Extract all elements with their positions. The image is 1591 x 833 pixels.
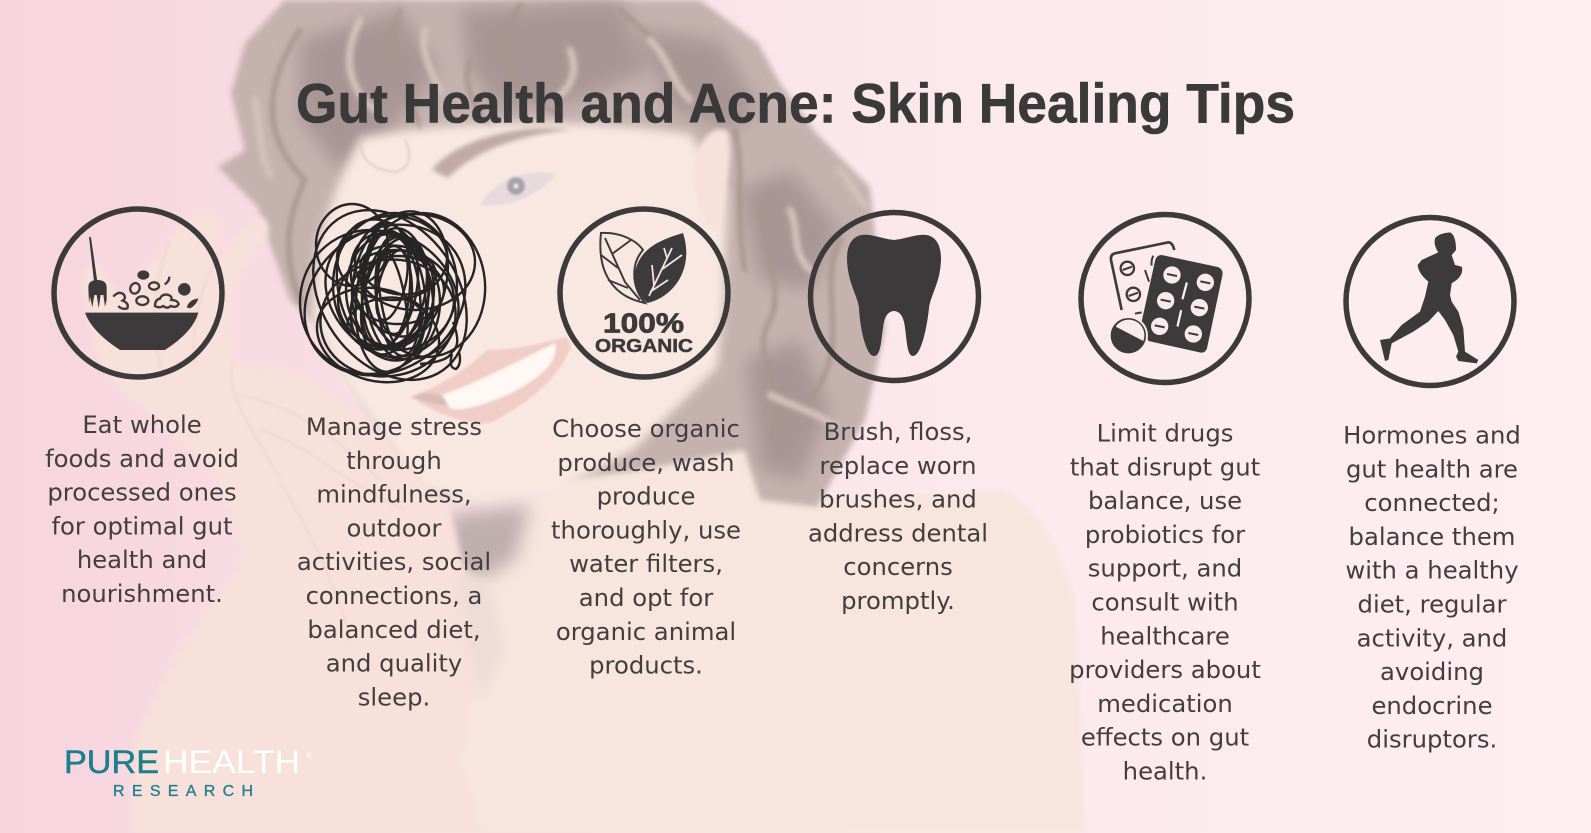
tip text: hormones: balance them (1349, 522, 1515, 551)
photo: eyebrow (432, 128, 570, 178)
icon: 100% organic badge: ORGANIC (595, 336, 693, 356)
tip text: whole foods: foods and avoid (45, 444, 239, 473)
tip text: organic produce: produce, wash (557, 448, 735, 477)
logo: Pure Health Research: HEALTH (163, 744, 300, 780)
icon: tangled scribble (275, 181, 498, 409)
tip text: hormones: Hormones and (1343, 420, 1521, 450)
tip text: medications: effects on gut (1081, 723, 1249, 752)
tip text: hormones: activity, and (1357, 623, 1507, 652)
tip text: dental care: replace worn (819, 451, 977, 480)
tip text: whole foods: Eat whole (82, 410, 202, 439)
tip text: medications: healthcare (1100, 621, 1230, 650)
tip text: stress: mindfulness, (316, 480, 472, 509)
tip text: medications: medication (1097, 689, 1233, 718)
tip text: whole foods: health and (77, 545, 207, 574)
tip text: stress: sleep. (358, 682, 430, 711)
tip text: stress: and quality (326, 649, 462, 678)
tip text: medications: Limit drugs (1097, 418, 1233, 448)
tip text: organic produce: water filters, (569, 549, 723, 578)
tip text: dental care: Brush, floss, (824, 417, 972, 446)
tip text: medications: consult with (1091, 588, 1239, 616)
logo: Pure Health Research: RESEARCH (113, 783, 253, 800)
photo: hair strands (255, 5, 865, 440)
tip text: organic produce: thoroughly, use (551, 515, 741, 544)
title: Gut Health and Acne: Skin Healing Tips (296, 72, 1295, 134)
photo: neck shadow (448, 505, 530, 580)
tip text: whole foods: for optimal gut (51, 511, 233, 540)
tip text: organic produce: produce (597, 482, 695, 511)
photo: raised hand and arm (82, 211, 480, 833)
tip text: organic produce: organic animal (556, 617, 736, 646)
photo: lips and smile (410, 337, 571, 423)
icon: food bowl (54, 209, 222, 377)
photo: ear (692, 129, 730, 230)
background photo: woman smiling (82, 0, 1085, 833)
tip text: medications: providers about (1069, 655, 1261, 684)
tip text: hormones: gut health are (1346, 454, 1518, 483)
photo: forehead curl (361, 135, 409, 172)
tip text: medications: support, and (1088, 554, 1242, 583)
tip text: hormones: endocrine (1371, 691, 1493, 720)
photo: eye (480, 172, 556, 205)
photo: face (312, 123, 727, 507)
tip text: dental care: brushes, and (819, 485, 977, 514)
icon: tooth (810, 212, 978, 380)
tip text: hormones: connected; (1364, 488, 1500, 517)
photo: finger creases (154, 240, 405, 640)
tip text: medications: balance, use (1088, 486, 1242, 515)
tip text: organic produce: Choose organic (552, 414, 740, 443)
tip text: stress: activities, social (297, 547, 491, 576)
tip text: organic produce: products. (589, 651, 703, 680)
logo: Pure Health Research: PURE (64, 744, 159, 780)
photo: hair (218, 0, 885, 507)
logo: Pure Health Research (64, 744, 312, 800)
tip text: stress: through (346, 446, 442, 475)
tip text: dental care: promptly. (841, 586, 955, 615)
tip text: hormones: avoiding (1380, 657, 1484, 686)
photo: hair dark patches (300, 0, 840, 480)
tip text: medications: probiotics for (1085, 520, 1245, 549)
tip text: stress: outdoor (347, 513, 441, 542)
tip text: hormones: diet, regular (1358, 590, 1506, 618)
tip text: dental care: concerns (843, 552, 953, 581)
icon: 100% organic badge: 100% (603, 308, 684, 338)
tip text: whole foods: processed ones (47, 478, 237, 507)
icon: 100% organic badge (560, 209, 728, 377)
photo: shoulders and torso (300, 400, 1085, 833)
tip text: organic produce: and opt for (579, 583, 713, 612)
icon: medication blister packs (1081, 214, 1249, 382)
icon: runner (1346, 218, 1514, 386)
tip text: dental care: address dental (808, 518, 988, 547)
tip text: hormones: with a healthy (1345, 556, 1519, 585)
tip text: medications: that disrupt gut (1070, 452, 1260, 481)
logo: Pure Health Research: ® (306, 751, 312, 760)
tip text: stress: Manage stress (306, 412, 482, 441)
photo: arm shadow (455, 570, 505, 700)
tip text: stress: connections, a (306, 581, 482, 610)
tip text: hormones: disruptors. (1367, 725, 1497, 754)
tip text: whole foods: nourishment. (61, 579, 223, 608)
tip text: medications: health. (1123, 756, 1207, 786)
tip text: stress: balanced diet, (307, 615, 481, 644)
